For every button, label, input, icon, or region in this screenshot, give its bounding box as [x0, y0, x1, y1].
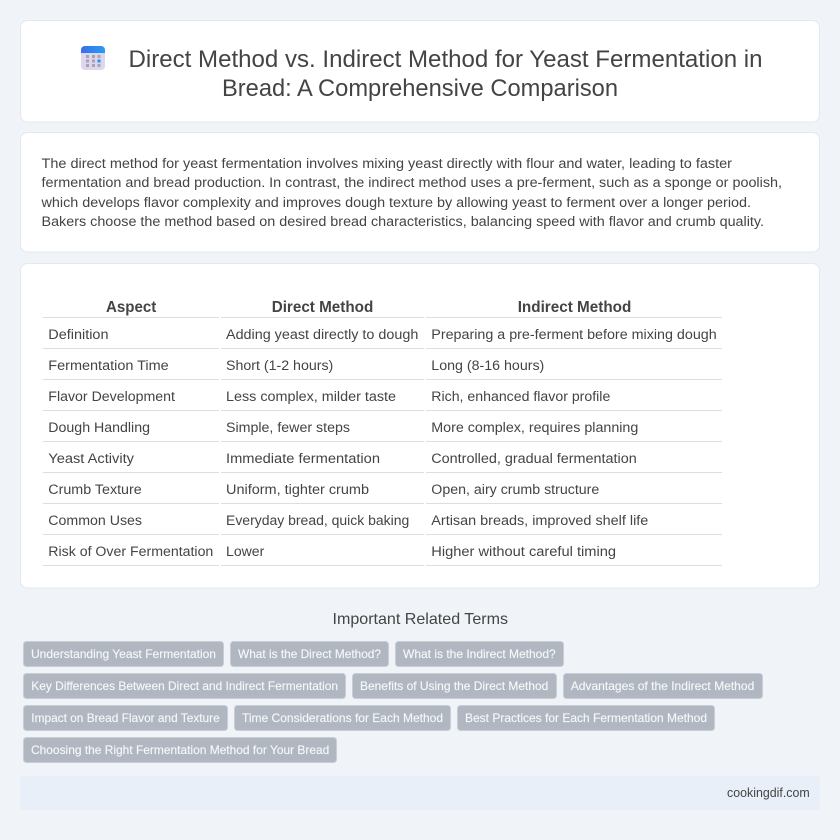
title	[128, 46, 762, 102]
table row: yeast activity: Controlled, gradual fermentation	[431, 451, 637, 467]
table row: definition	[43, 327, 722, 348]
tag: choosing the right method: Choosing the Right Fermentation Method for Your Bread	[31, 743, 329, 757]
tag: benefits of direct method: Benefits of Using the Direct Method	[360, 679, 548, 693]
table row: dough handling: Simple, fewer steps	[226, 420, 350, 436]
table row: dough handling: More complex, requires planning	[431, 420, 638, 436]
table row: fermentation time: Fermentation Time	[48, 358, 169, 374]
table header row: Aspect	[106, 299, 156, 316]
table row: flavor development	[43, 389, 722, 410]
table row: fermentation time	[43, 358, 722, 380]
table row: dough handling: Dough Handling	[48, 420, 150, 436]
panel: summary	[20, 132, 820, 252]
table row: risk of over fermentation	[43, 544, 722, 566]
panel: header	[20, 20, 820, 122]
table row: crumb texture: Crumb Texture	[48, 482, 142, 498]
tag: what is the indirect method	[396, 642, 564, 666]
tag: key differences: Key Differences Between Direct and Indirect Fermentation	[31, 679, 338, 693]
table row: risk of over fermentation: Risk of Over Fermentation	[48, 544, 213, 560]
table header row: Direct Method	[272, 299, 373, 316]
related term tags	[24, 642, 762, 762]
tag: key differences	[24, 674, 346, 698]
tag: choosing the right method	[24, 738, 336, 762]
footer band	[20, 776, 820, 810]
table row: risk of over fermentation: Higher without careful timing	[431, 544, 616, 560]
table row: crumb texture: Uniform, tighter crumb	[226, 482, 369, 498]
summary paragraph: fermentation and bread production. In contrast, the indirect method uses a pre-ferment, such as a sponge or poolish,	[42, 175, 782, 191]
table row: flavor development: Rich, enhanced flavor profile	[431, 389, 610, 405]
title: Bread: A Comprehensive Comparison	[222, 75, 618, 102]
table row: common uses	[43, 513, 722, 534]
summary paragraph: which develops flavor complexity and improves dough texture by allowing yeast to ferment over a longer period.	[40, 195, 751, 211]
panel: comparison table	[20, 264, 820, 588]
table row: risk of over fermentation: Lower	[226, 544, 265, 560]
tag: time considerations	[234, 706, 450, 730]
tag: time considerations: Time Considerations for Each Method	[242, 711, 443, 725]
tag: understanding yeast fermentation	[24, 642, 224, 666]
tag: what is the direct method	[230, 642, 388, 666]
table row: dough handling	[43, 420, 722, 442]
table header row: Indirect Method	[518, 299, 631, 316]
summary paragraph: Bakers choose the method based on desired bread characteristics, balancing speed with flavor and crumb quality.	[42, 214, 764, 230]
table row: crumb texture	[43, 482, 722, 504]
table row: fermentation time: Long (8-16 hours)	[431, 358, 544, 374]
table row: common uses: Artisan breads, improved shelf life	[431, 513, 648, 529]
tag: impact on flavor and texture	[24, 706, 228, 730]
tag: what is the indirect method: What is the Indirect Method?	[403, 647, 556, 661]
tag: what is the direct method: What is the Direct Method?	[238, 647, 381, 661]
title: Direct Method vs. Indirect Method for Yeast Fermentation in	[128, 46, 762, 73]
footer site name: cookingdif.com	[727, 786, 810, 800]
table row: yeast activity: Immediate fermentation	[226, 451, 380, 467]
table row: common uses: Everyday bread, quick baking	[226, 513, 409, 529]
tag: impact on flavor and texture: Impact on Bread Flavor and Texture	[31, 711, 220, 725]
icon: calendar	[81, 46, 105, 70]
heading: related terms: Important Related Terms	[332, 611, 508, 628]
table row: definition: Preparing a pre-ferment before mixing dough	[431, 327, 717, 343]
table row: crumb texture: Open, airy crumb structure	[431, 482, 599, 498]
table row: definition: Adding yeast directly to dough	[226, 327, 418, 343]
table row: fermentation time: Short (1-2 hours)	[226, 358, 333, 374]
table row: flavor development: Less complex, milder taste	[226, 389, 396, 405]
tag: benefits of direct method	[352, 674, 556, 698]
tag: understanding yeast fermentation: Understanding Yeast Fermentation	[31, 647, 216, 661]
tag: advantages of indirect method	[564, 674, 762, 698]
tag: advantages of indirect method: Advantages of the Indirect Method	[571, 679, 754, 693]
table row: flavor development: Flavor Development	[48, 389, 175, 405]
table row: definition: Definition	[48, 327, 108, 343]
summary paragraph	[40, 156, 782, 230]
tag: best practices	[458, 706, 714, 730]
table row: yeast activity	[43, 451, 722, 472]
tag: best practices: Best Practices for Each Fermentation Method	[465, 711, 707, 725]
table row: common uses: Common Uses	[48, 513, 142, 529]
table row: yeast activity: Yeast Activity	[48, 451, 135, 467]
table header row	[43, 299, 722, 318]
summary paragraph: The direct method for yeast fermentation involves mixing yeast directly with flour and water, leading to faster	[42, 156, 732, 172]
